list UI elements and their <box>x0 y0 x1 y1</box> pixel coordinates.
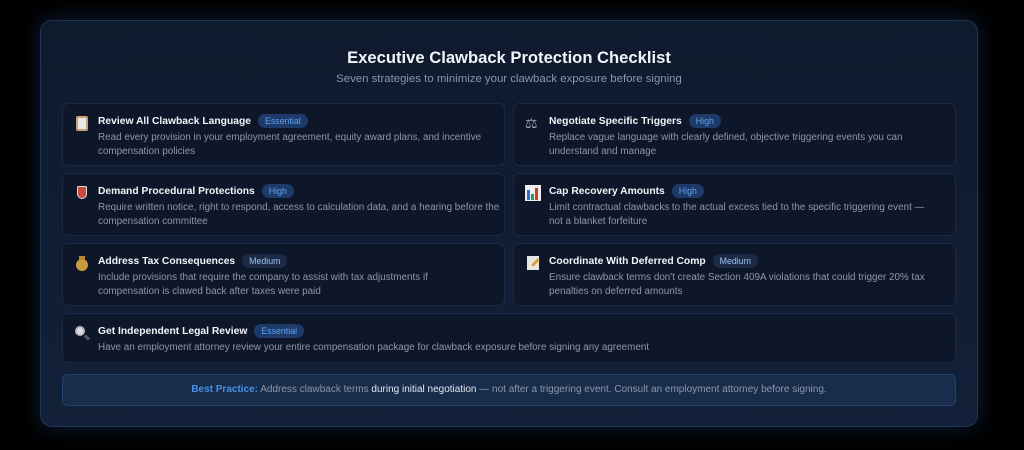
card: procedural <box>62 173 505 236</box>
icon: scales: ⚖ <box>525 115 538 131</box>
card: procedural: Demand Procedural Protections <box>98 186 255 196</box>
title: Executive Clawback Protection Checklist <box>347 48 671 67</box>
card: legal review: Have an employment attorney review your entire compensation package for clawback exposure before signing any agreement <box>98 342 649 353</box>
callout: best practice <box>62 374 956 406</box>
card: cap recovery: Limit contractual clawbacks to the actual excess tied to the specific triggering event — <box>549 202 924 213</box>
card: specific triggers: High <box>696 116 714 126</box>
card: tax: Medium <box>249 256 280 266</box>
card: procedural: High <box>269 186 287 196</box>
icon: clipboard <box>76 116 88 131</box>
icon: magnifier <box>75 326 90 340</box>
card: cap recovery <box>513 173 956 236</box>
card: review language: Read every provision in your employment agreement, equity award plans, and incentive <box>98 132 481 143</box>
card: review language: Essential <box>265 116 301 126</box>
card: legal review: Essential <box>261 326 297 336</box>
card: review language <box>62 103 505 166</box>
card: legal review <box>62 313 956 363</box>
card: tax: Address Tax Consequences <box>98 256 235 266</box>
card: cap recovery: High <box>679 186 697 196</box>
card: review language: Review All Clawback Language <box>98 116 251 126</box>
card: deferred comp: Ensure clawback terms don't create Section 409A violations that could trigger 20% tax <box>549 272 925 283</box>
card: specific triggers <box>513 103 956 166</box>
subtitle: Seven strategies to minimize your clawback exposure before signing <box>336 73 682 85</box>
card: review language: compensation policies <box>98 146 195 157</box>
card: specific triggers: Replace vague language with clearly defined, objective triggering events you can <box>549 132 903 143</box>
card: tax: Include provisions that require the company to assist with tax adjustments if <box>98 272 428 283</box>
card: procedural: compensation committee <box>98 216 208 227</box>
icon: bar chart <box>525 185 541 201</box>
card: legal review: Get Independent Legal Review <box>98 326 247 336</box>
icon: memo <box>527 256 540 270</box>
card: deferred comp <box>513 243 956 306</box>
icon: shield <box>77 186 87 199</box>
callout: best practice: Best Practice: Address clawback terms during initial negotiation — not after a triggering event. Consult an employment attorney before signing. <box>191 384 827 395</box>
card: deferred comp: penalties on deferred amounts <box>549 286 682 297</box>
card: procedural: Require written notice, right to respond, access to calculation data, and a hearing before the <box>98 202 499 213</box>
card: tax: compensation is clawed back after taxes were paid <box>98 286 321 297</box>
card: specific triggers: understand and manage <box>549 146 656 157</box>
card: cap recovery: Cap Recovery Amounts <box>549 186 665 196</box>
card: cap recovery: not a blanket forfeiture <box>549 216 647 227</box>
icon: money bag <box>76 256 88 271</box>
card: tax <box>62 243 505 306</box>
card: deferred comp: Coordinate With Deferred Comp <box>549 256 706 266</box>
card: specific triggers: Negotiate Specific Triggers <box>549 116 682 126</box>
card: deferred comp: Medium <box>720 256 751 266</box>
